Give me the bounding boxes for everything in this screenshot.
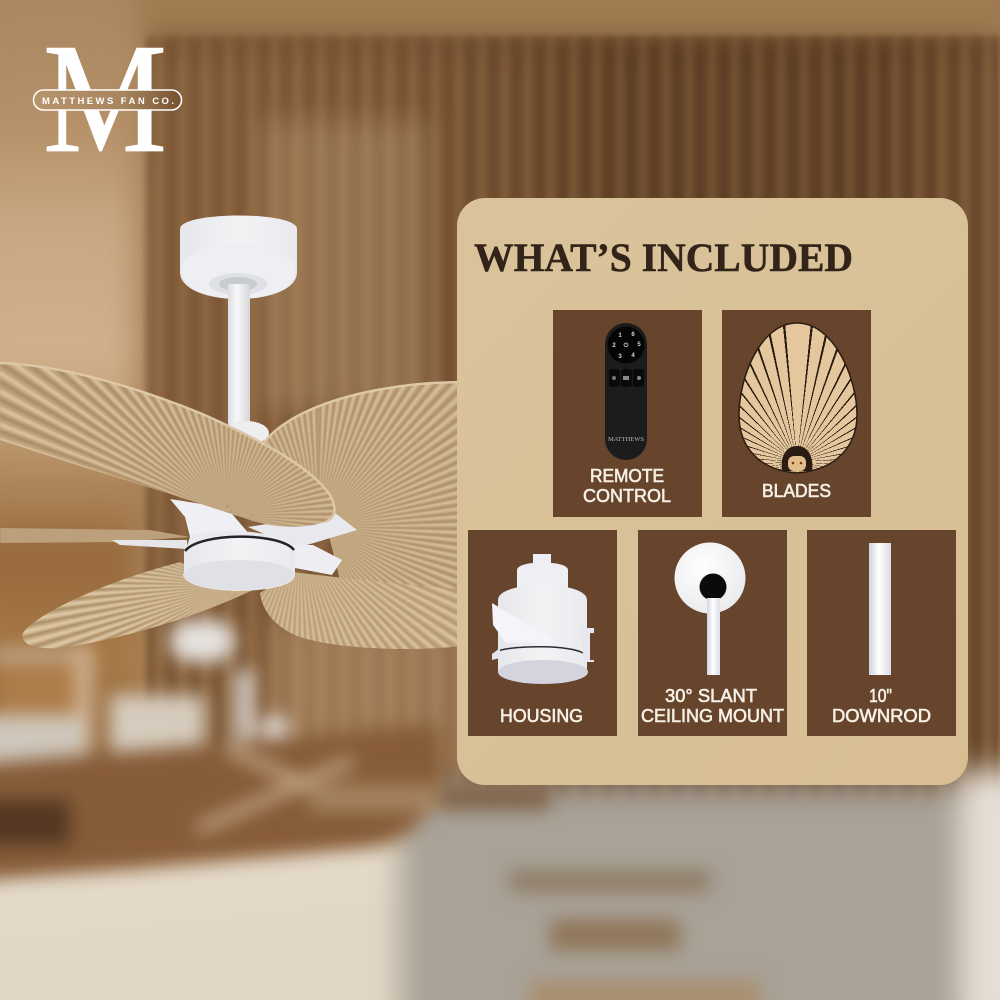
icon: remote: 6 xyxy=(631,332,635,338)
blade: thin left xyxy=(0,528,190,543)
icon: slant mount xyxy=(674,542,746,675)
icon: housing xyxy=(492,554,594,684)
label: downrod: DOWNROD xyxy=(832,706,931,726)
heading: WHAT’S INCLUDED xyxy=(474,235,853,280)
label: downrod xyxy=(832,686,931,726)
label: ceiling mount: 30° SLANT xyxy=(665,686,757,706)
blade: bottom right xyxy=(260,572,457,649)
label: ceiling mount: CEILING MOUNT xyxy=(641,706,784,726)
blade: top left xyxy=(0,364,334,527)
logo name pill xyxy=(34,90,182,110)
icon: remote: 3 xyxy=(618,354,622,360)
label: ceiling mount xyxy=(641,686,784,726)
card: remote control xyxy=(553,310,702,517)
icon: remote: 2 xyxy=(612,343,616,349)
logo xyxy=(32,11,182,185)
icon: remote: ⏻ xyxy=(624,342,629,349)
card: downrod xyxy=(807,530,956,736)
icon: remote: 5 xyxy=(637,342,641,348)
icon: downrod xyxy=(869,543,891,675)
icon: remote: MATTHEWS xyxy=(608,436,644,443)
icon: remote: 4 xyxy=(631,353,635,359)
icon: blade xyxy=(738,322,858,474)
card: ceiling mount xyxy=(638,530,787,736)
card: blades xyxy=(722,310,871,517)
label: remote control: CONTROL xyxy=(583,486,671,506)
label: downrod: 10" xyxy=(869,686,892,706)
icon: remote: 1 xyxy=(618,333,622,339)
ceiling fan xyxy=(0,216,457,649)
icon: remote xyxy=(605,323,647,460)
blade: right xyxy=(265,383,457,589)
label: remote control xyxy=(583,466,671,506)
label: remote control: REMOTE xyxy=(590,466,664,486)
panel: what's included xyxy=(457,198,968,785)
logo monogram M: M xyxy=(43,11,167,185)
logo name pill: MATTHEWS FAN CO. xyxy=(42,96,174,107)
label: housing: HOUSING xyxy=(500,706,583,726)
card: housing xyxy=(468,530,617,736)
blade: bottom left xyxy=(22,562,252,648)
label: blades: BLADES xyxy=(762,481,831,501)
